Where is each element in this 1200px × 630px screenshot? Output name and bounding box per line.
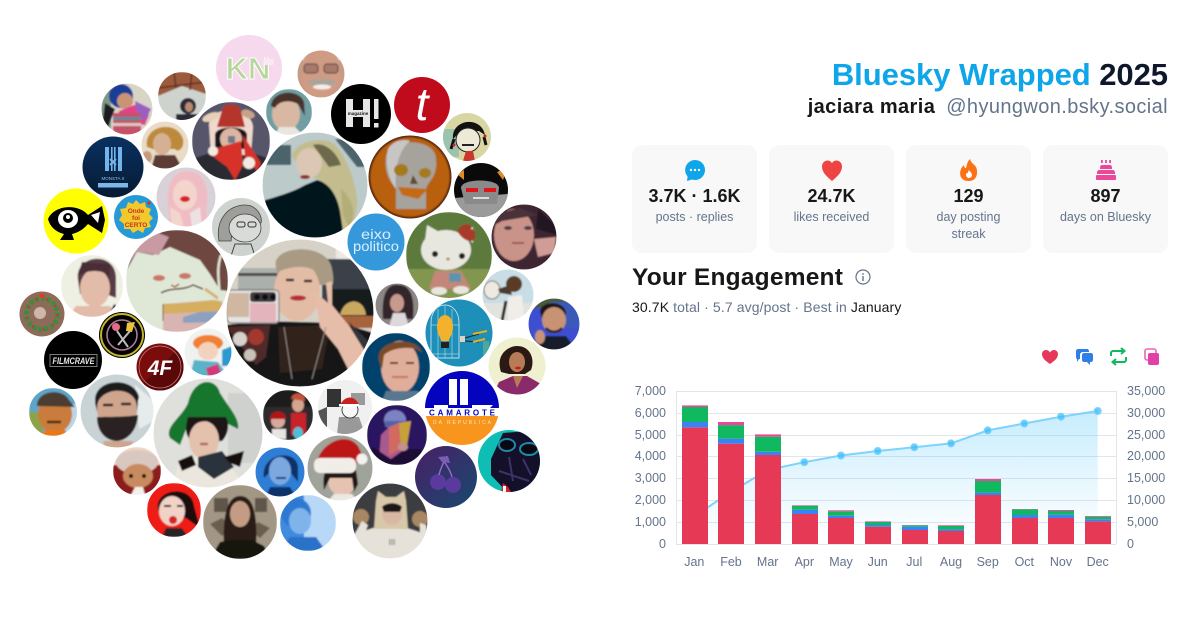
cumulative area [694, 411, 1098, 544]
avatar: protest megaphone [482, 269, 534, 323]
month labels: Feb [720, 555, 742, 569]
left axis labels [635, 384, 666, 551]
avatar: blue badge with yellow starburst: Onde [128, 208, 145, 215]
avatar: eixo politico logo: eixo [361, 226, 391, 242]
avatar: man smiling with blue light [528, 298, 580, 350]
avatar: curly woman illustration [488, 337, 546, 395]
avatar: woman with fringe [61, 255, 123, 317]
avatar: 4F maroon logo [136, 343, 184, 391]
avatar: eixo politico logo: politico [353, 238, 399, 254]
left axis labels: 7,000 [635, 384, 666, 398]
month labels: Dec [1087, 555, 1109, 569]
avatar: bear hoodie person [352, 483, 428, 559]
avatar: pencil sketch of person with glasses [212, 198, 270, 256]
avatar: cherries [415, 446, 477, 508]
cumulative line [694, 408, 1101, 516]
avatar: curly blonde glasses woman [141, 121, 189, 169]
stat card: day posting streak: streak [951, 226, 986, 240]
icon: birthday cake [1096, 160, 1116, 180]
avatar: red t logo: t [416, 78, 431, 130]
stat card: days on Bluesky: 897 [1090, 186, 1121, 206]
avatar: person with striped book [101, 83, 153, 135]
avatar: Monsta X style navy logo: MONSTA X [102, 176, 124, 181]
avatar: blue badge with yellow starburst: CERTO [125, 222, 147, 229]
avatar: Monchhichi doll with Santa hat [113, 447, 161, 495]
heading: Your Engagement: Your Engagement [632, 264, 843, 291]
bar: April [792, 505, 818, 544]
stat card: likes received [769, 145, 894, 253]
left axis labels: 3,000 [635, 471, 666, 485]
chart legend icons [1042, 347, 1159, 366]
avatar: boy with green tree hat [153, 378, 264, 488]
stat card: day posting streak: 129 [953, 186, 984, 206]
icon: heart [822, 160, 842, 181]
icon: replies chat [1076, 349, 1093, 365]
avatar: main user selfie [226, 239, 374, 387]
user name and handle: jaciara maria @hyungwon.bsky.social [808, 96, 1168, 118]
avatar: red background girl [147, 483, 201, 537]
stacked bars [682, 405, 1111, 544]
avatar: hello kitty [406, 212, 492, 299]
stat card: posts and replies: posts · replies [656, 210, 733, 224]
avatar: wreath cookie [19, 291, 65, 337]
bar: August [938, 525, 964, 544]
month labels: Oct [1015, 555, 1035, 569]
icon: quotes squares [1145, 349, 1159, 365]
avatar: blue duotone boy [255, 447, 305, 497]
bar: October [1012, 509, 1038, 544]
avatar: blue badge with yellow starburst: foi [132, 215, 140, 222]
avatar: KN pink logo: KN [226, 51, 270, 86]
right axis labels: 0 [1127, 537, 1134, 551]
left axis labels: 5,000 [635, 428, 666, 442]
avatar: boy with blue face paint [266, 89, 312, 135]
avatar: woman in patterned room [203, 485, 277, 559]
avatar: 4F maroon logo: 4F [147, 357, 173, 380]
avatar: dark troll character [454, 163, 508, 217]
avatar: red t logo [394, 77, 450, 133]
bar: January [682, 405, 708, 544]
right axis labels [1127, 384, 1165, 551]
avatar: orange hair boy in costume [184, 328, 232, 376]
chart grid [676, 391, 1116, 544]
left axis labels: 6,000 [635, 406, 666, 420]
stat card: days on Bluesky [1043, 145, 1168, 253]
avatar: cartoon girl with pigtails [443, 113, 491, 161]
month labels: Sep [977, 555, 999, 569]
avatar: man with cap [29, 388, 79, 436]
avatar: FILMCRAVE logo: FILMCRAVE [52, 356, 95, 366]
avatar: Darth Vader with glasses [478, 430, 540, 492]
avatar: older man with glasses [298, 50, 344, 98]
right axis labels: 20,000 [1127, 449, 1165, 463]
month labels: Jun [868, 555, 888, 569]
avatar: group photo with red shirt [263, 390, 313, 440]
bar: March [755, 434, 781, 544]
avatar: man on blue background [362, 333, 430, 401]
right axis labels: 10,000 [1127, 493, 1165, 507]
title: Bluesky Wrapped 2025 [832, 57, 1168, 92]
icon: info [855, 269, 871, 285]
left axis labels: 0 [659, 537, 666, 551]
right axis labels: 15,000 [1127, 471, 1165, 485]
avatar: blue-tinted boy [280, 495, 336, 551]
month labels: May [829, 555, 854, 569]
avatar: pink hair girl [156, 167, 216, 227]
stat card: likes received: 24.7K [807, 186, 856, 206]
bar: September [975, 479, 1001, 544]
avatar: girl with Santa hat [307, 435, 373, 501]
avatar: selfie under wooden roof [158, 72, 206, 124]
stat card: day posting streak [906, 145, 1031, 253]
avatar: skull on fire [368, 135, 452, 219]
month labels [684, 555, 1109, 569]
bar: February [718, 422, 744, 544]
stat card: day posting streak: day posting [937, 210, 1000, 224]
avatar: girl hiding face [375, 283, 419, 327]
avatar: manga panel with Santa hat [318, 380, 372, 434]
avatar: Camarote da Republica logo: CAMAROTE [429, 408, 496, 418]
avatar: eixo politico logo [347, 213, 405, 271]
icon: chat bubble [685, 160, 705, 181]
stat card: likes received: likes received [794, 210, 869, 224]
icon: reposts [1111, 348, 1126, 365]
avatar: person with colored fan [367, 405, 427, 465]
month labels: Jul [906, 555, 922, 569]
right axis labels: 35,000 [1127, 384, 1165, 398]
avatar: Camarote da Republica logo [425, 371, 499, 446]
avatar: round pin badge [99, 312, 145, 358]
avatar: cat illustration with cigarette [126, 230, 228, 332]
icon: likes heart [1042, 350, 1058, 364]
avatar: lightbulb in birdcage [425, 299, 493, 367]
avatar: bear hoodie person: III [389, 538, 395, 547]
left axis labels: 2,000 [635, 493, 666, 507]
avatar: FILMCRAVE logo [44, 331, 102, 389]
stat card: posts and replies [632, 145, 757, 253]
avatar: fish on yellow logo [43, 188, 109, 254]
bar: June [865, 521, 891, 544]
avatar: woman leaning on hand [491, 204, 557, 270]
avatar: H! magazine: magazine [348, 111, 369, 116]
left axis labels: 1,000 [635, 515, 666, 529]
icon: flame [960, 159, 978, 181]
month labels: Apr [795, 555, 814, 569]
avatar: KN pink logo [216, 35, 282, 101]
month labels: Mar [757, 555, 778, 569]
avatar: blonde woman in black [262, 132, 368, 238]
avatar: Camarote da Republica logo: DA REPUBLICA [433, 420, 492, 426]
bar: July [902, 525, 928, 544]
right axis labels: 5,000 [1127, 515, 1158, 529]
avatar: bearded man [80, 374, 154, 448]
bar: December [1085, 516, 1111, 544]
avatar: Monsta X style navy logo [82, 136, 144, 198]
bar: November [1048, 510, 1074, 544]
right axis labels: 25,000 [1127, 428, 1165, 442]
avatar: reindeer hood girl [192, 102, 270, 180]
avatar: H! magazine [331, 84, 391, 144]
avatar: blue badge with yellow starburst [114, 195, 158, 239]
month labels: Jan [684, 555, 704, 569]
bar: May [828, 510, 854, 544]
left axis labels: 4,000 [635, 449, 666, 463]
engagement summary line: 30.7K total · 5.7 avg/post · Best in January [632, 299, 901, 315]
right axis labels: 30,000 [1127, 406, 1165, 420]
month labels: Aug [940, 555, 962, 569]
stat card: days on Bluesky: days on Bluesky [1060, 210, 1151, 224]
avatar bubble cluster [20, 35, 580, 559]
month labels: Nov [1050, 555, 1073, 569]
stat card: posts and replies: 3.7K · 1.6K [648, 186, 741, 206]
